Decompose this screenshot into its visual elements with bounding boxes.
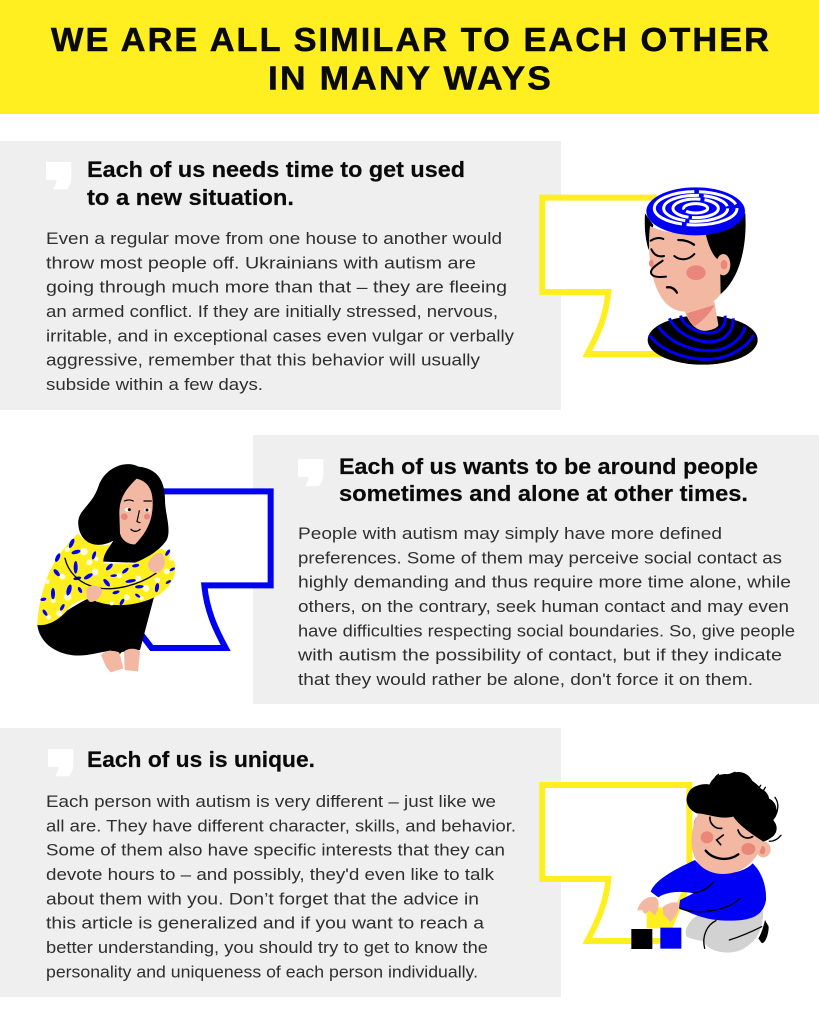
face (691, 813, 763, 874)
title: IN MANY WAYS (268, 60, 553, 98)
heading: Each of us needs time to get used (87, 157, 465, 182)
speech bubble outline (142, 491, 271, 648)
panel: around people and alone (253, 435, 819, 704)
blocks (631, 928, 681, 949)
body text: throw most people off. Ukrainians with autism are (46, 253, 476, 272)
body text: Some of them also have specific interests that they can (46, 841, 505, 860)
body text: aggressive, remember that this behavior will usually (46, 351, 481, 370)
body text: going through much more than that – they are fleeing (46, 278, 507, 297)
body text: preferences. Some of them may perceive social contact as (298, 548, 782, 567)
body text: others, on the contrary, seek human contact and may even (298, 597, 789, 616)
heading: to a new situation. (87, 185, 294, 210)
speech bubble outline (542, 785, 689, 941)
cheeks (686, 265, 706, 280)
hands (86, 553, 165, 602)
panel: time to get used to a new situation (0, 141, 561, 410)
body text: all are. They have different character, skills, and behavior. (46, 816, 516, 835)
neck (685, 302, 718, 331)
sweater (37, 533, 175, 625)
hair (78, 464, 169, 563)
illustration: boy playing with blocks in yellow speech bubble (542, 772, 781, 953)
sweater pattern: blue leaves (40, 538, 176, 617)
panel: each of us is unique (0, 728, 561, 997)
heading (339, 454, 758, 506)
shoe (758, 920, 769, 943)
body text: an armed conflict. If they are initially stressed, nervous, (46, 302, 498, 321)
heading: sometimes and alone at other times. (339, 481, 748, 506)
heading: Each of us is unique. (87, 747, 315, 772)
hair highlights (714, 772, 781, 841)
body text: personality and uniqueness of each person individually. (46, 962, 478, 981)
hair (687, 772, 777, 842)
ears (694, 817, 771, 857)
facial features (651, 238, 694, 293)
body text: with autism the possibility of contact, but if they indicate (297, 646, 782, 665)
maze disc (646, 187, 745, 235)
body text: subside within a few days. (46, 375, 263, 394)
face (119, 479, 153, 544)
sweater pattern: white dots (45, 547, 175, 620)
facial features (121, 500, 151, 531)
hands (637, 897, 679, 922)
icon: quotation mark (298, 459, 323, 486)
body text: Each person with autism is very different – just like we (46, 792, 496, 811)
body text: People with autism may simply have more defined (298, 524, 722, 543)
body text: about them with you. Don’t forget that the advice in (46, 889, 479, 908)
hair (645, 213, 746, 295)
body text (46, 229, 515, 394)
body text: Even a regular move from one house to another would (46, 229, 502, 248)
shoulders with striped sweater (648, 315, 758, 365)
speech bubble outline (542, 198, 663, 354)
yellow block (647, 907, 677, 928)
trousers (686, 910, 763, 953)
ear (716, 254, 730, 275)
body text: this article is generalized and if you want to reach a (46, 914, 485, 933)
legs (37, 593, 155, 656)
illustration: man with maze head in yellow speech bubble (542, 187, 758, 365)
body text (46, 792, 516, 981)
body text: devote hours to – and possibly, they'd even like to talk (46, 865, 495, 884)
feet (101, 649, 140, 672)
illustration: woman hugging herself in blue speech bubble (37, 464, 271, 672)
body text: better understanding, you should try to get to know the (46, 938, 488, 957)
body text: that they would rather be alone, don't force it on them. (298, 670, 753, 689)
body text: irritable, and in exceptional cases even vulgar or verbally (46, 326, 515, 345)
body text: have difficulties respecting social boundaries. So, give people (298, 621, 795, 640)
arm lines (65, 558, 156, 589)
sweater (651, 860, 766, 921)
body text: highly demanding and thus require more time alone, while (298, 573, 791, 592)
body text (297, 524, 795, 689)
facial features (701, 817, 755, 859)
header banner (0, 0, 819, 114)
title (51, 22, 771, 98)
heading (87, 157, 465, 210)
heading: Each of us wants to be around people (339, 454, 758, 479)
face (649, 226, 721, 312)
icon: quotation mark (48, 749, 73, 776)
title: WE ARE ALL SIMILAR TO EACH OTHER (51, 22, 771, 59)
icon: quotation mark (46, 162, 71, 189)
